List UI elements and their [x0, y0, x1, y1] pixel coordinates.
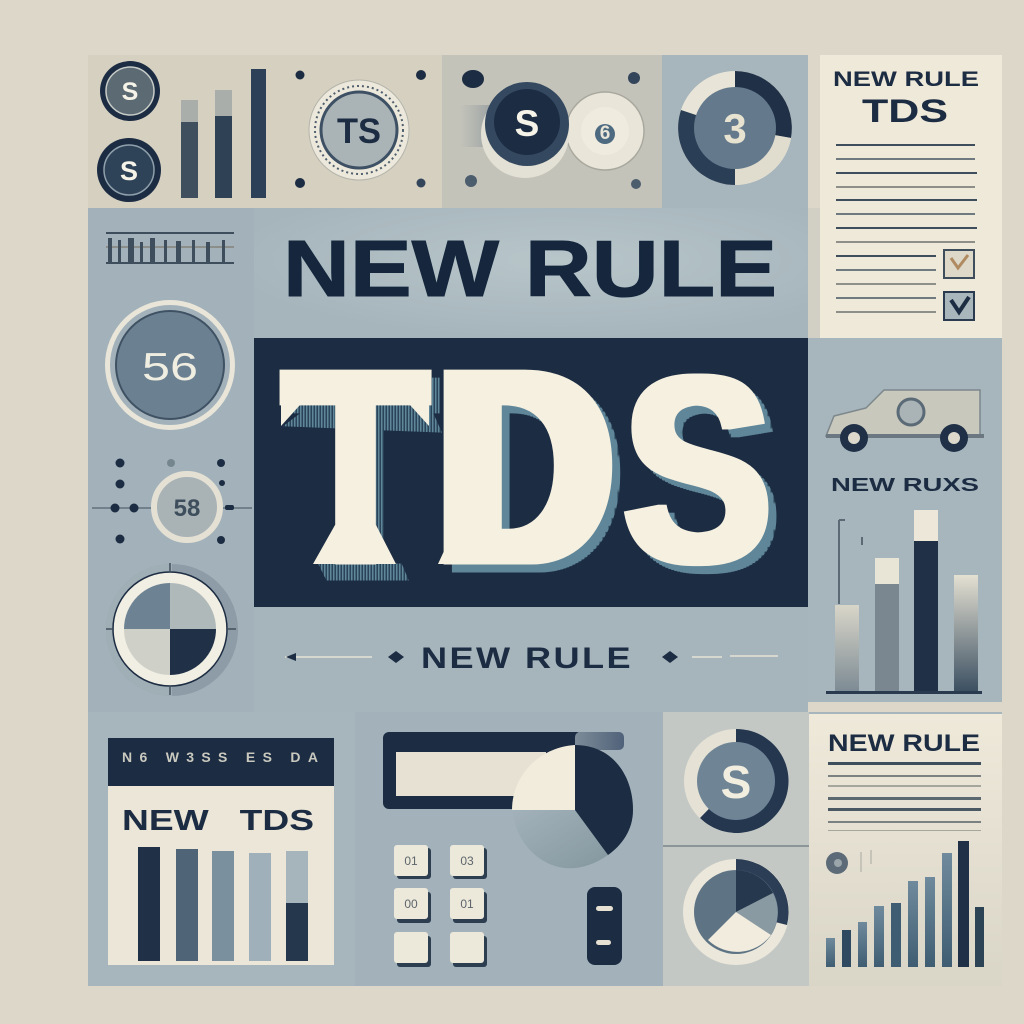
- text: new rule: NEW RULE: [833, 68, 979, 91]
- icon: cream coin: 6: [600, 123, 610, 144]
- text: new tds: NEW TDS: [122, 805, 314, 837]
- icon: coin upper: S: [122, 78, 138, 106]
- icon: dark pill: [587, 887, 622, 965]
- text: new rule: NEW RULE: [828, 730, 980, 757]
- text: TDS: TDS: [862, 93, 948, 129]
- panel: right document: [820, 55, 1002, 338]
- report lines: [828, 762, 981, 831]
- calculator keys: 01: [460, 897, 474, 911]
- icon: pie dial: [683, 859, 789, 965]
- heading: NEW RULE: NEW RULE: [283, 224, 777, 313]
- icon: coin lower: [97, 138, 161, 202]
- icon: dark coin: [481, 82, 569, 178]
- title: TDS extruded shadow: [287, 321, 779, 629]
- text: small header: N6 W3SS ES DA: [122, 749, 318, 765]
- icon: coin upper: [100, 61, 160, 121]
- icon: checkbox lower: [944, 292, 974, 320]
- icon: dial: [678, 71, 792, 185]
- panel: top coins and bars: [88, 55, 442, 208]
- bar chart: right: [826, 510, 982, 694]
- panel: left column: [88, 208, 254, 712]
- icon: TS badge: [295, 70, 426, 188]
- title: TDS: S: [624, 322, 771, 618]
- icon: cream coin: [566, 92, 644, 170]
- panel: bottom row background: [88, 712, 1002, 986]
- panel: heading band: [254, 208, 808, 338]
- panel: top double coin: [442, 55, 662, 208]
- mini barcode chart: [106, 232, 234, 264]
- panel: light gutter beside document: [808, 208, 820, 338]
- calculator keys: 01: [404, 854, 418, 868]
- title: TDS extruded shadow: D: [448, 321, 618, 629]
- panel: bottom right report: [809, 714, 1002, 986]
- panel: main blue-grey field: [88, 208, 808, 712]
- icon: small dial: [826, 850, 872, 874]
- subtitle: new rule with flourishes: NEW RULE: [421, 642, 633, 675]
- title: TDS: T: [279, 313, 432, 621]
- panel: right column: [808, 338, 1002, 702]
- text: new ruxs: NEW RUXS: [831, 475, 979, 495]
- icon: dial: 3: [723, 105, 747, 152]
- icon: checkbox upper: [944, 250, 974, 278]
- document lines: [836, 145, 977, 312]
- icon: small target diagram: 58: [174, 495, 200, 522]
- icon: TS badge: TS: [337, 112, 381, 151]
- panel: dark TDS banner: [254, 313, 808, 629]
- pie chart: [512, 745, 633, 868]
- title: TDS extruded shadow: S: [632, 330, 779, 626]
- icon: dollar coin: S: [721, 756, 751, 808]
- bar chart: rising: [826, 841, 984, 967]
- panel: bottom coin dials: [663, 712, 809, 986]
- calculator keys: [394, 845, 487, 967]
- icon: display bar: [383, 732, 624, 809]
- title: TDS extruded shadow: T: [287, 321, 440, 629]
- icon: dark coin: S: [515, 103, 539, 144]
- bar chart: card: [138, 847, 308, 961]
- title: TDS: D: [440, 313, 610, 621]
- bar chart: top: [181, 69, 266, 198]
- icon: quartered circle: [106, 563, 238, 696]
- calculator keys: 03: [460, 854, 474, 868]
- panel: bottom left chart card: [108, 738, 334, 965]
- icon: 56 dial: 56: [142, 346, 198, 389]
- icon: 56 dial: [105, 300, 235, 430]
- calculator keys: 00: [404, 897, 418, 911]
- icon: dollar coin: [684, 729, 789, 833]
- subtitle: new rule with flourishes: [285, 642, 778, 675]
- title: TDS: [279, 313, 771, 621]
- icon: coin lower: S: [120, 156, 138, 186]
- panel: bottom middle calculator: [355, 712, 663, 986]
- icon: small target diagram: [92, 458, 252, 544]
- icon: van: [826, 390, 984, 452]
- panel: top dial: [662, 55, 808, 208]
